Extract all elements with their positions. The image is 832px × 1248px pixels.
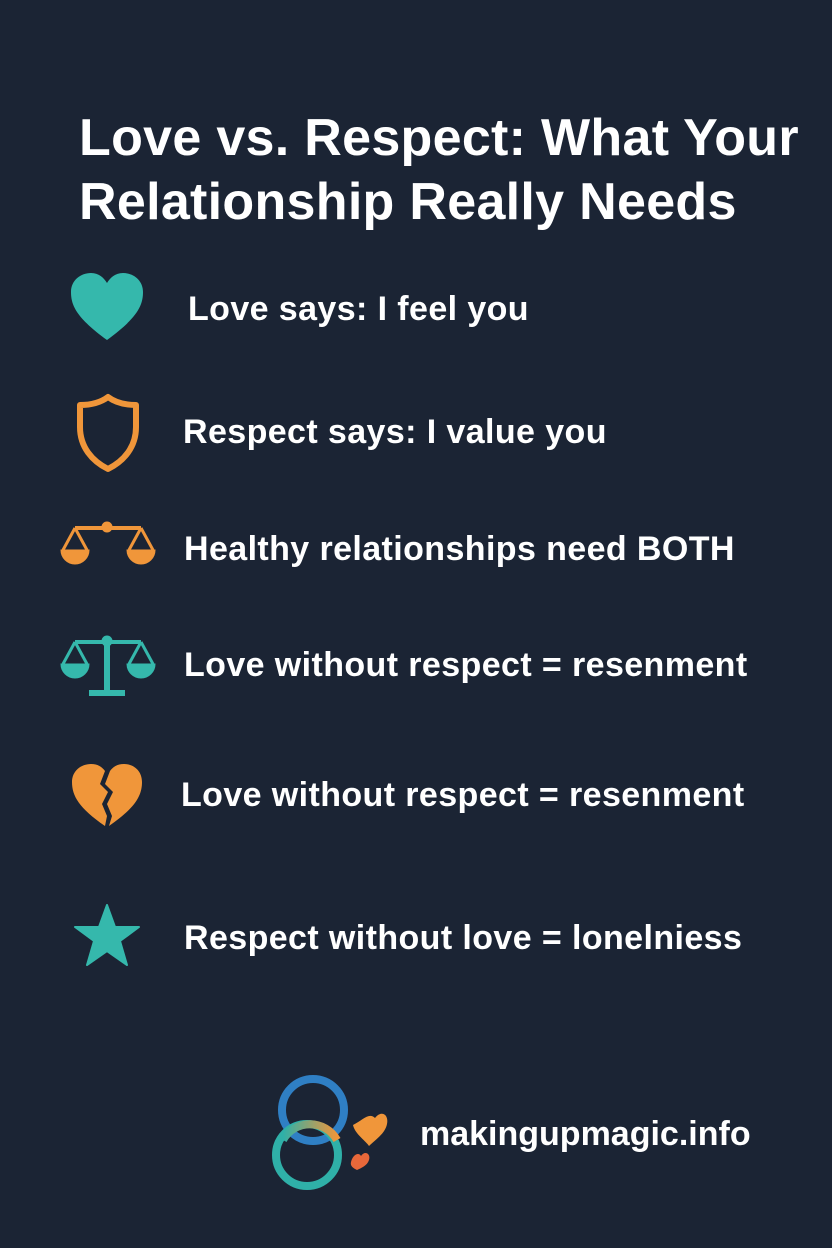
title: Love vs. Respect: What Your — [79, 109, 799, 167]
icon: star — [74, 904, 140, 966]
text: respect without love: Respect without love = lonelniess — [184, 919, 742, 957]
title — [79, 109, 799, 231]
text: healthy: Healthy relationships need BOTH — [184, 530, 735, 568]
icon: teal scale — [60, 636, 156, 696]
text: love says: Love says: I feel you — [188, 290, 529, 328]
text: love without respect 2: Love without respect = resenment — [181, 776, 745, 814]
icon: broken heart — [72, 764, 142, 826]
icon: heart — [71, 273, 143, 340]
text: website: makingupmagic.info — [420, 1115, 751, 1153]
text: respect says: Respect says: I value you — [183, 413, 607, 451]
icon: orange scale — [60, 522, 156, 564]
logo — [272, 1075, 388, 1190]
title: Relationship Really Needs — [79, 173, 737, 231]
text: love without respect: Love without respect = resenment — [184, 646, 748, 684]
icon: shield — [77, 394, 139, 472]
